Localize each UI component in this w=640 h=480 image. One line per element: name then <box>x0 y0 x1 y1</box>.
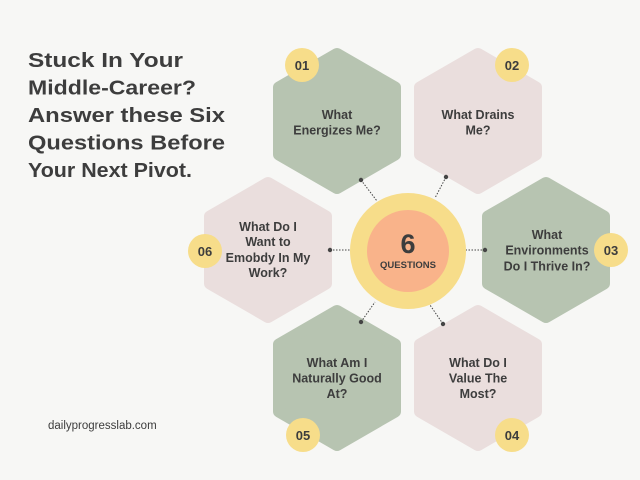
badges: 03 <box>604 243 618 258</box>
center circle: 6 questions: QUESTIONS <box>380 260 436 271</box>
hexagon 03: Do I Thrive In? <box>504 260 590 274</box>
title: Your Next Pivot. <box>28 159 192 182</box>
center circle: 6 questions: 6 <box>400 229 416 259</box>
hexagon 03: What <box>532 228 563 242</box>
hexagon 03: Environments <box>505 244 589 258</box>
title: Middle-Career? <box>28 76 196 100</box>
hexagon 06: Work? <box>249 266 287 280</box>
badges: 02 <box>505 58 519 73</box>
badges: 05 <box>296 428 310 443</box>
hexagon 05: What Am I <box>307 356 367 370</box>
title: Questions Before <box>28 132 225 154</box>
badges: 01 <box>295 58 309 73</box>
title: Stuck In Your <box>28 49 183 72</box>
hexagon 02: Me? <box>466 124 490 138</box>
hexagon 01: Energizes Me? <box>293 124 381 138</box>
hexagon 04 <box>420 311 536 445</box>
hexagon 04: What Do I <box>449 356 507 370</box>
hexagon 05 <box>279 311 395 445</box>
connectors <box>328 175 487 326</box>
badges: 04 <box>505 428 520 443</box>
title: Answer these Six <box>28 104 226 127</box>
hexagon 06: What Do I <box>239 220 297 234</box>
hexagon 02 <box>420 54 536 188</box>
footer: website: dailyprogresslab.com <box>48 420 157 432</box>
center circle: 6 questions <box>350 193 466 309</box>
hexagon 01 <box>279 54 395 188</box>
hexagon 02: What Drains <box>442 108 515 122</box>
hexagon 04: Most? <box>460 387 496 401</box>
hexagon 06 <box>210 183 326 317</box>
hexagon 01: What <box>322 108 353 122</box>
hexagon 06: Want to <box>245 235 291 249</box>
hexagon 04: Value The <box>449 372 507 386</box>
title <box>28 49 226 182</box>
hexagon 05: At? <box>327 387 347 401</box>
badges <box>188 48 628 452</box>
badges: 06 <box>198 244 212 259</box>
hexagon 03 <box>488 183 604 317</box>
hexagon 06: Emobdy In My <box>226 251 310 265</box>
hexagon 05: Naturally Good <box>292 372 382 386</box>
